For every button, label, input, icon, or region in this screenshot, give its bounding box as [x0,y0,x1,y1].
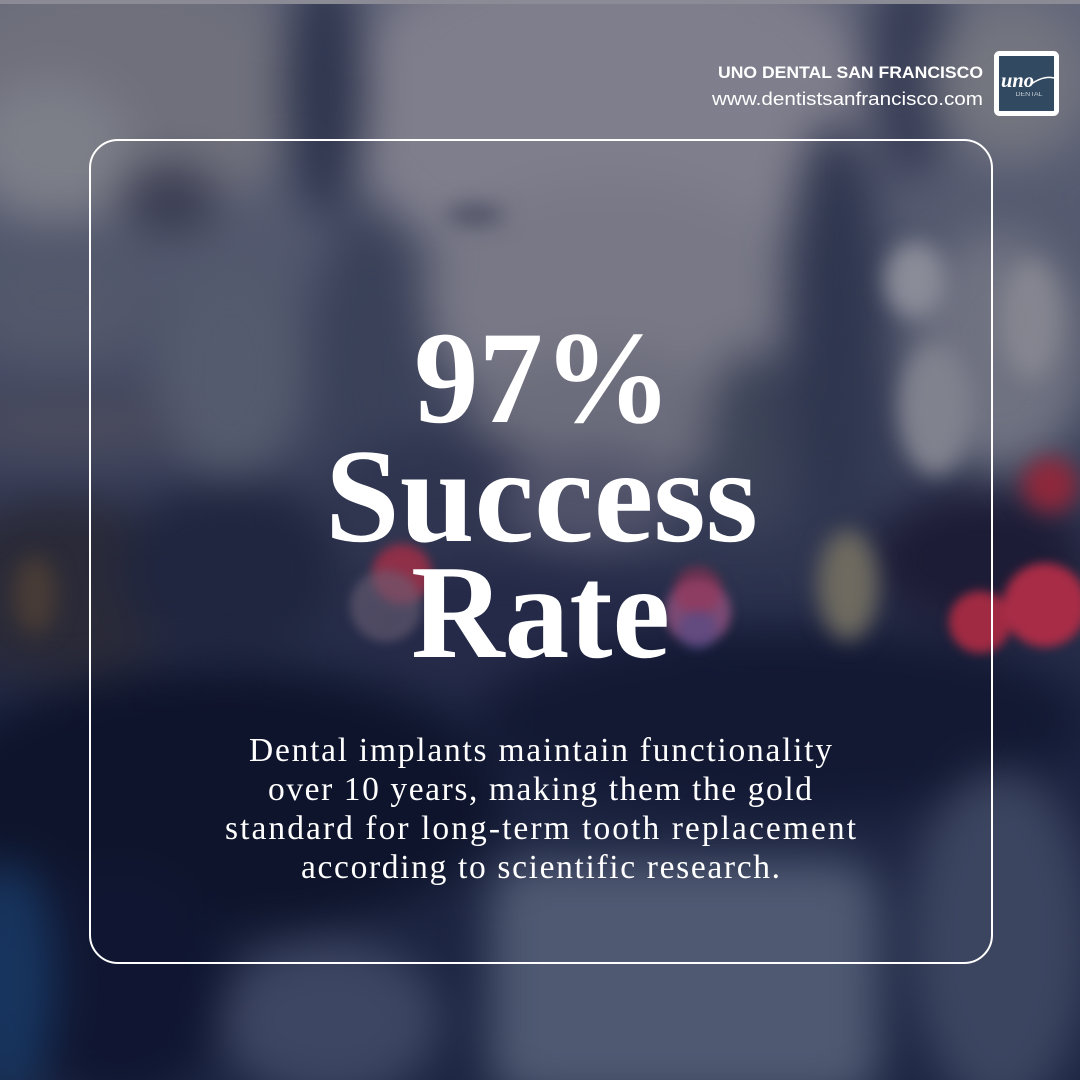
body paragraph: according to scientific research. [301,849,780,886]
logo badge: DENTAL [1016,92,1043,98]
headline [325,304,758,686]
website: www.dentistsanfrancisco.com [711,89,983,109]
body paragraph: standard for long-term tooth replacement [225,810,857,847]
logo badge: uno [1001,70,1034,92]
headline line: Rate: Rate [411,538,670,686]
brand header [711,54,1056,114]
headline line: Success: Success [325,422,758,570]
logo badge [996,54,1056,114]
clinic name: UNO DENTAL SAN FRANCISCO [718,64,983,82]
outlined rounded panel [90,140,992,963]
headline line: 97%: 97% [414,304,672,451]
body paragraph: Dental implants maintain functionality [249,732,832,769]
body paragraph: over 10 years, making them the gold [268,771,812,808]
body paragraph [225,732,857,886]
